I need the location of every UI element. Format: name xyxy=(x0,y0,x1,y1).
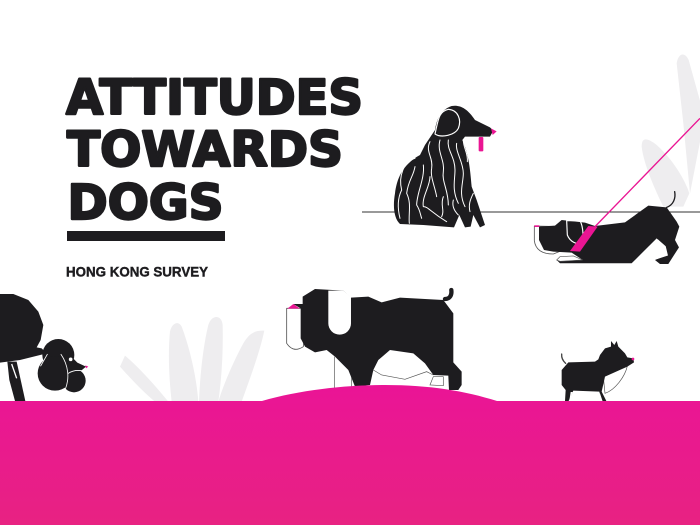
body xyxy=(562,341,634,403)
harness xyxy=(570,226,598,252)
tongue xyxy=(479,137,483,151)
plant: lower left background leaves xyxy=(120,317,264,402)
nose xyxy=(632,358,634,360)
title: ATTITUDES xyxy=(66,70,363,126)
front and hind leg outlines xyxy=(334,357,443,390)
plant: top right background leaves xyxy=(642,54,700,207)
paw xyxy=(557,256,583,261)
title: DOGS xyxy=(68,175,224,231)
title underline xyxy=(67,231,225,241)
title xyxy=(66,70,363,231)
body xyxy=(293,289,462,390)
dog: sitting long-haired dog xyxy=(394,106,497,227)
eye xyxy=(69,357,72,361)
leash xyxy=(595,118,700,227)
fur strands xyxy=(398,140,473,223)
legs xyxy=(7,362,25,401)
body xyxy=(539,206,679,264)
ground line xyxy=(362,211,700,213)
chest xyxy=(603,366,627,393)
ear xyxy=(435,109,460,136)
tail xyxy=(667,192,675,207)
nose xyxy=(491,128,497,135)
ear and muzzle lines xyxy=(41,354,83,390)
snout xyxy=(287,308,307,349)
nose xyxy=(287,304,300,309)
tail xyxy=(562,354,566,363)
dog: large spotted dog on the hill xyxy=(287,289,462,390)
paws xyxy=(569,392,603,401)
subtitle: HONG KONG SURVEY xyxy=(66,264,208,280)
ear xyxy=(328,291,351,335)
nose xyxy=(534,225,539,227)
ear xyxy=(567,221,583,244)
title: TOWARDS xyxy=(67,122,343,178)
nose xyxy=(85,365,88,368)
tail xyxy=(445,290,451,299)
body and head xyxy=(0,294,86,392)
pink ground with hill xyxy=(0,385,700,525)
dog: play-bowing dog on a leash xyxy=(534,118,700,264)
rear paw xyxy=(657,240,667,258)
jaw xyxy=(534,226,563,254)
dog: poodle with head bowed xyxy=(0,294,88,401)
dog: small dog on the right xyxy=(562,341,634,403)
